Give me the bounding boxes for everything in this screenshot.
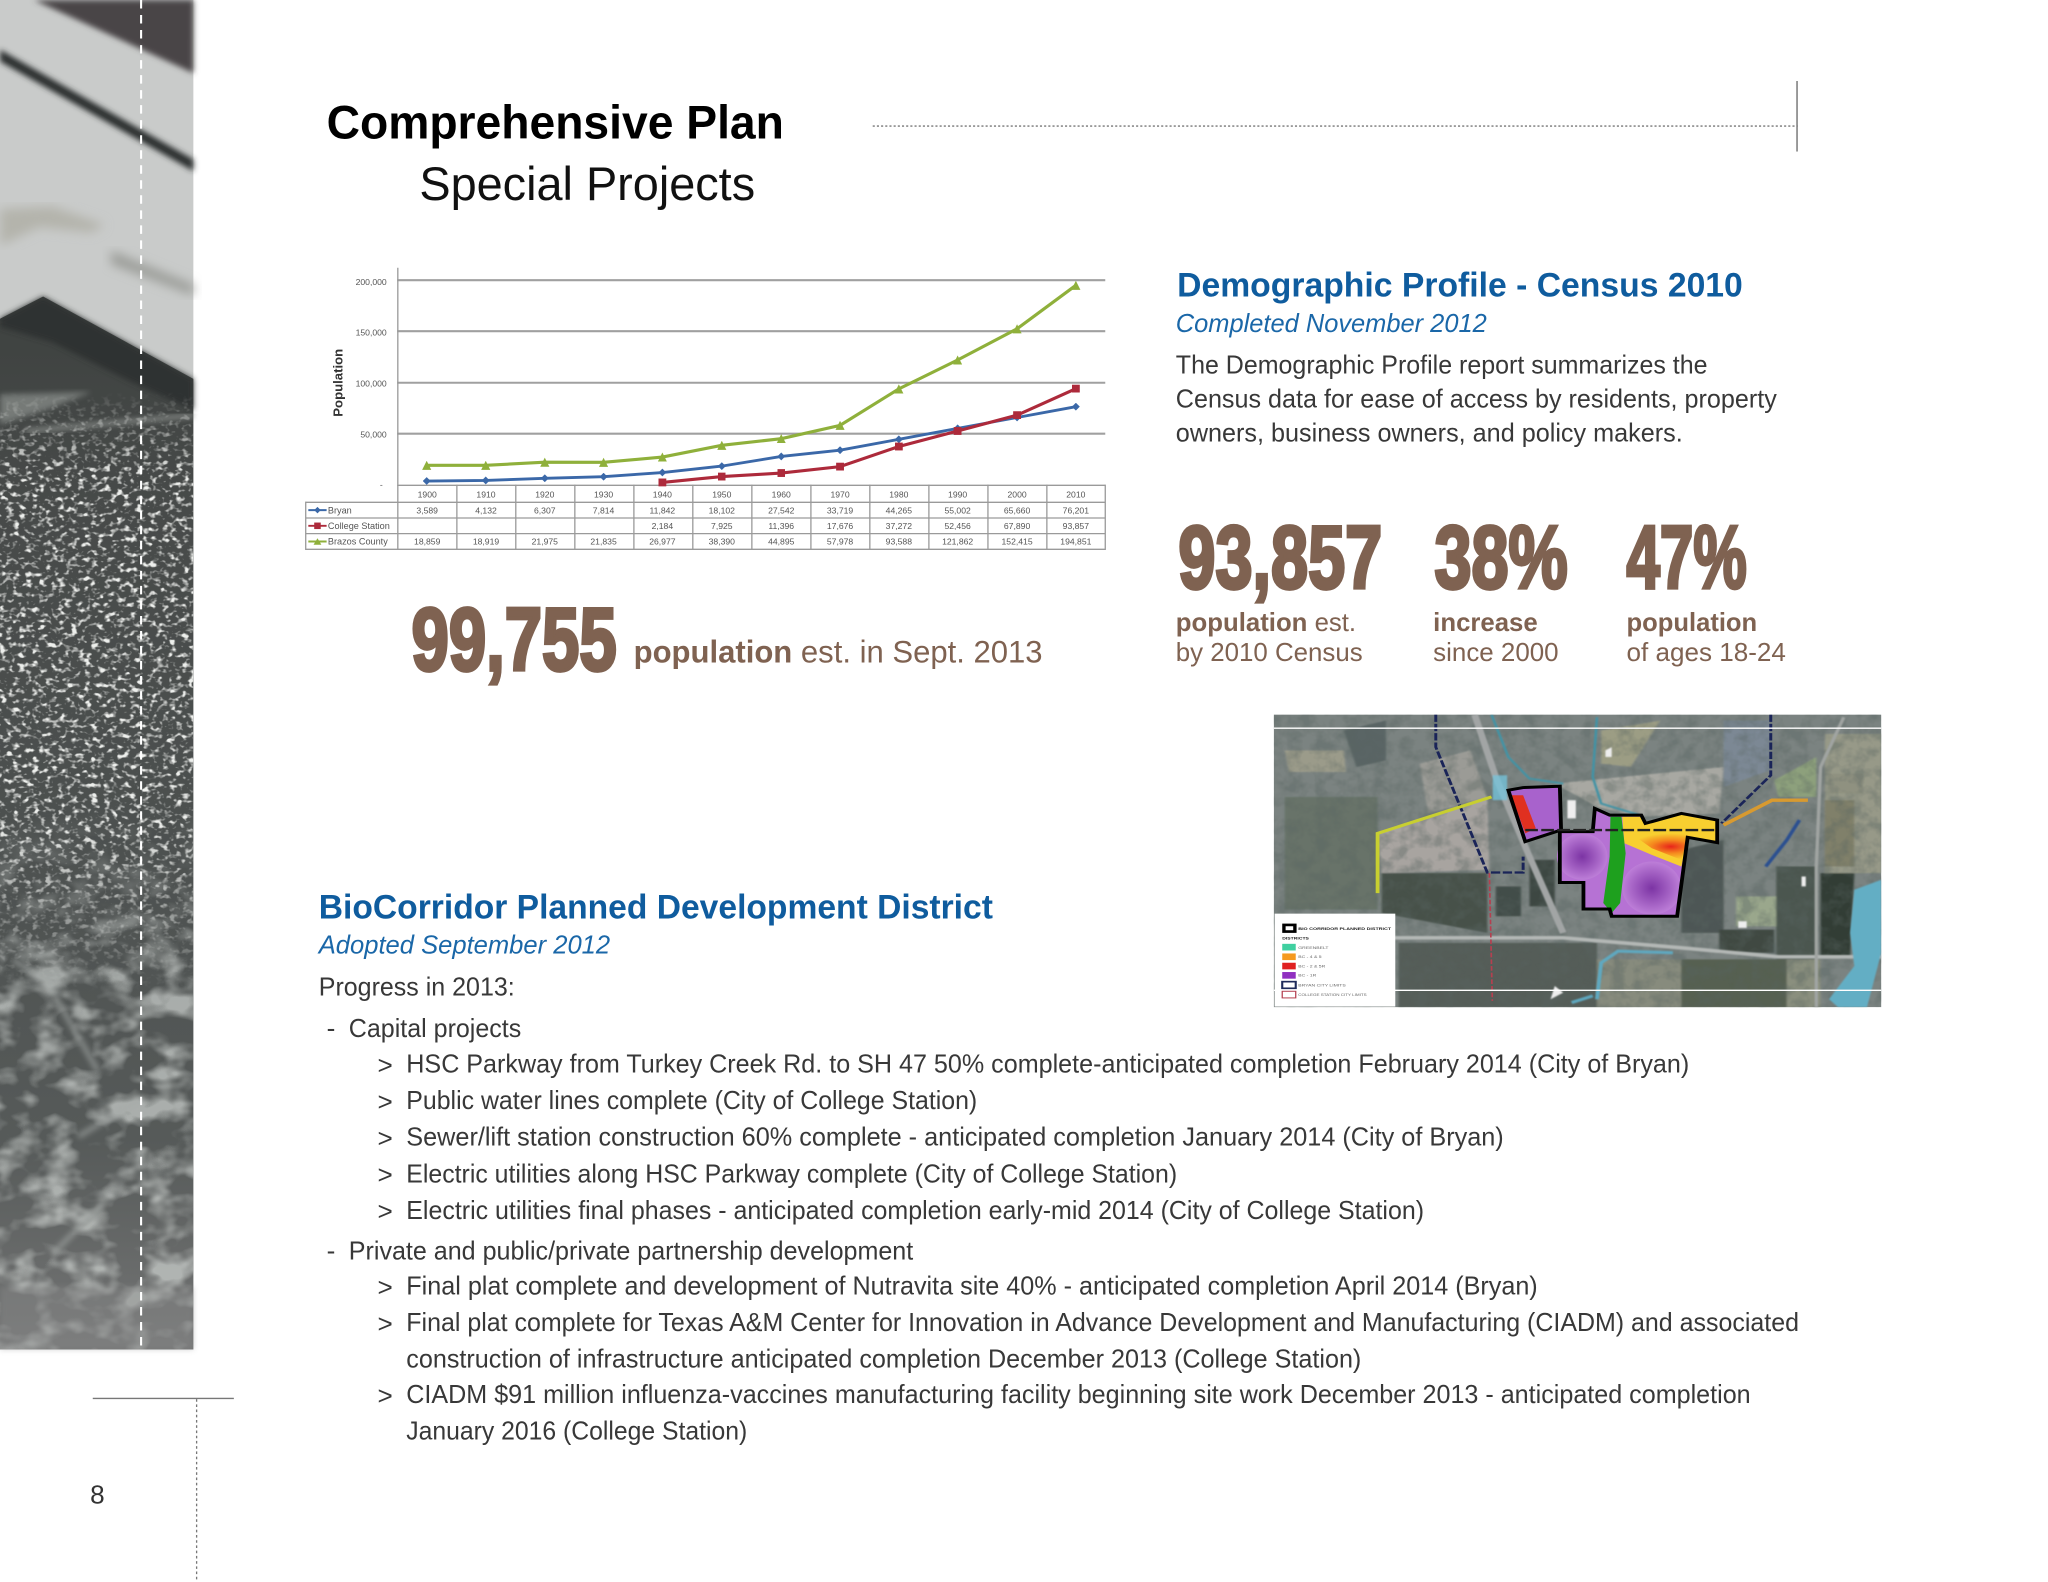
- table row: Brazos County: 152,415: [1002, 537, 1033, 547]
- population line chart with data table: [306, 268, 1105, 550]
- BioCorridor text block: [317, 888, 1799, 1446]
- private development list: [327, 1235, 1799, 1446]
- series: Bryan: [427, 407, 1076, 481]
- table row: Bryan: 44,265: [886, 505, 912, 515]
- table row: Bryan: 6,307: [534, 505, 556, 515]
- stat: 47%: 47%: [1627, 508, 1747, 607]
- map frame lines: [1274, 728, 1881, 990]
- adopted date: Adopted September 2012: [317, 930, 611, 960]
- table years: 1930: [594, 490, 613, 500]
- private development list: Final plat complete for Texas A&M Center for Innovation in Advance Development and Manufacturing (CIADM) and associated: [406, 1307, 1799, 1337]
- stat: 93,857: population est.: [1176, 607, 1356, 637]
- map roads and rivers: [1394, 715, 1881, 1007]
- map legend: DISTRICTS: [1282, 936, 1309, 940]
- stat: 99,755 population: [412, 590, 1043, 689]
- table row: College Station: [308, 521, 1089, 531]
- table years: 2010: [1066, 490, 1086, 500]
- demographic profile text: [1176, 267, 1777, 448]
- private development list: Private and public/private partnership development: [349, 1235, 914, 1265]
- capital projects list: HSC Parkway from Turkey Creek Rd. to SH 47 50% complete-anticipated completion February 2014 (City of Bryan): [406, 1049, 1689, 1079]
- stat: 93,857: [1176, 508, 1382, 667]
- map legend: [1275, 914, 1395, 1007]
- capital projects list: Public water lines complete (City of College Station): [406, 1085, 977, 1115]
- table row: Bryan: 27,542: [768, 505, 795, 515]
- table row: Brazos County: 38,390: [709, 537, 735, 547]
- stat: 47%: of ages 18-24: [1627, 637, 1786, 667]
- capital projects list: [327, 1013, 1689, 1226]
- y axis ticks: 200,000: [356, 277, 387, 287]
- white dashed line on photo: [140, 0, 142, 1349]
- private development list: Final plat complete and development of Nutravita site 40% - anticipated completion April 2014 (Bryan): [406, 1271, 1538, 1301]
- private development list: -: [327, 1235, 335, 1265]
- private development list: CIADM $91 million influenza-vaccines manufacturing facility beginning site work December 2013 - anticipated completion: [406, 1379, 1751, 1409]
- table row: Brazos County: [308, 537, 1092, 547]
- y axis ticks: -: [380, 479, 383, 489]
- demographic profile text: owners, business owners, and policy makers.: [1176, 418, 1683, 448]
- stat: 47%: [1627, 508, 1786, 667]
- data table grid: [306, 485, 1105, 550]
- private development list: January 2016 (College Station): [406, 1416, 747, 1446]
- table row: Bryan: [308, 505, 1089, 515]
- left aerial photo strip: [0, 0, 193, 1349]
- table row: Brazos County: 57,978: [827, 537, 853, 547]
- capital projects list: >: [378, 1050, 393, 1080]
- table row: College Station: 93,857: [1063, 521, 1089, 531]
- capital projects list: Capital projects: [349, 1013, 521, 1043]
- capital projects list: Electric utilities along HSC Parkway complete (City of College Station): [406, 1158, 1177, 1188]
- stat: 99,755 population: population est. in Sept. 2013: [634, 634, 1043, 669]
- table row: Brazos County: 121,862: [942, 537, 973, 547]
- table row: Bryan: 18,102: [709, 505, 735, 515]
- title: Special Projects: [419, 157, 755, 210]
- table row: College Station: 17,676: [827, 521, 853, 531]
- stat: 38%: since 2000: [1433, 637, 1559, 667]
- map legend: BRYAN CITY LIMITS: [1298, 983, 1346, 987]
- private development list: >: [378, 1272, 393, 1302]
- table row: Brazos County: 93,588: [886, 537, 912, 547]
- capital projects list: >: [378, 1160, 393, 1190]
- utility corridors: [1378, 797, 1491, 893]
- demographic profile text: Census data for ease of access by residents, property: [1176, 384, 1777, 414]
- map legend: BC - 2 & 5R: [1298, 964, 1326, 968]
- stat: 93,857: by 2010 Census: [1176, 637, 1363, 667]
- table row: Bryan: 4,132: [475, 505, 497, 515]
- map legend: BC - 1R: [1298, 973, 1317, 978]
- table row: Brazos County: 21,975: [532, 537, 558, 547]
- map legend: BC - 4 & 5: [1298, 955, 1322, 959]
- demographic profile text: Demographic Profile - Census 2010: [1177, 267, 1743, 305]
- table row: Bryan: 65,660: [1004, 505, 1030, 515]
- table years: 1910: [476, 490, 496, 500]
- y axis ticks: 100,000: [356, 379, 387, 389]
- header rule: [873, 81, 1798, 152]
- table row: Brazos County: 18,919: [473, 537, 499, 547]
- stat: 93,857: 93,857: [1178, 508, 1382, 607]
- demographic profile text: The Demographic Profile report summarizes the: [1176, 350, 1708, 380]
- table row: College Station: 2,184: [652, 521, 673, 531]
- table row: Bryan: 76,201: [1063, 505, 1089, 515]
- stat: 38%: 38%: [1434, 508, 1568, 607]
- capital projects list: Electric utilities final phases - anticipated completion early-mid 2014 (City of College Station): [406, 1195, 1424, 1225]
- title: Comprehensive Plan: [327, 95, 784, 148]
- table row: Bryan: 3,589: [416, 505, 438, 515]
- capital projects list: >: [378, 1086, 393, 1116]
- private development list: >: [378, 1380, 393, 1410]
- table years: 2000: [1007, 490, 1027, 500]
- map legend: BIO CORRIDOR PLANNED DISTRICT: [1298, 926, 1391, 931]
- title: [327, 95, 784, 210]
- table row: Bryan: Bryan: [328, 505, 352, 515]
- capital projects list: -: [327, 1013, 335, 1043]
- table row: College Station: 67,890: [1004, 521, 1030, 531]
- table years: 1960: [772, 490, 791, 500]
- table years: [418, 490, 1086, 500]
- table row: Bryan: 7,814: [593, 505, 615, 515]
- y axis ticks: 150,000: [356, 328, 387, 338]
- table years: 1900: [418, 490, 437, 500]
- table years: 1980: [889, 490, 909, 500]
- table years: 1940: [653, 490, 672, 500]
- table row: College Station: 52,456: [944, 521, 971, 531]
- BioCorridor district map: [1274, 714, 1882, 1008]
- private development list: >: [378, 1308, 393, 1338]
- table years: 1970: [830, 490, 850, 500]
- table row: Bryan: 33,719: [827, 505, 853, 515]
- table row: College Station: 7,925: [711, 521, 733, 531]
- table row: College Station: 11,396: [768, 521, 794, 531]
- map legend: GREENBELT: [1298, 945, 1329, 950]
- series: Brazos County: [427, 285, 1076, 465]
- table years: 1920: [535, 490, 555, 500]
- table row: Brazos County: 21,835: [590, 537, 617, 547]
- table row: Brazos County: 44,895: [768, 537, 795, 547]
- map terrain: [1285, 721, 1881, 1007]
- table years: 1990: [948, 490, 967, 500]
- table row: Bryan: 11,842: [650, 505, 675, 515]
- stat: 38%: [1433, 508, 1568, 667]
- y axis ticks: [356, 277, 387, 489]
- table row: Brazos County: 18,859: [414, 537, 441, 547]
- table row: College Station: 37,272: [886, 521, 912, 531]
- table row: College Station: College Station: [328, 521, 390, 531]
- table row: Brazos County: Brazos County: [328, 537, 388, 547]
- progress label: Progress in 2013:: [319, 971, 515, 1001]
- table row: Brazos County: 26,977: [649, 537, 676, 547]
- footer rule and page number: 8: [90, 1480, 105, 1510]
- stat: 99,755 population: 99,755: [412, 590, 617, 689]
- map legend: COLLEGE STATION CITY LIMITS: [1298, 992, 1367, 997]
- demographic profile text: Completed November 2012: [1176, 308, 1487, 338]
- table row: Bryan: 55,002: [944, 505, 971, 515]
- stat: 38%: increase: [1433, 607, 1538, 637]
- planned district zones: [1508, 786, 1717, 916]
- capital projects list: Sewer/lift station construction 60% complete - anticipated completion January 2014 (City of Bryan): [406, 1122, 1504, 1152]
- y axis label: Population: [330, 349, 345, 417]
- capital projects list: >: [378, 1196, 393, 1226]
- table years: 1950: [712, 490, 732, 500]
- table row: Brazos County: 194,851: [1060, 537, 1092, 547]
- series: College Station: [662, 389, 1076, 482]
- heading: BioCorridor Planned Development District: [319, 888, 993, 926]
- private development list: construction of infrastructure anticipated completion December 2013 (College Station): [406, 1344, 1361, 1374]
- y axis ticks: 50,000: [360, 430, 387, 440]
- stat: 47%: population: [1627, 607, 1757, 637]
- city limit dashed boundaries: [1378, 715, 1808, 1001]
- capital projects list: >: [378, 1123, 393, 1153]
